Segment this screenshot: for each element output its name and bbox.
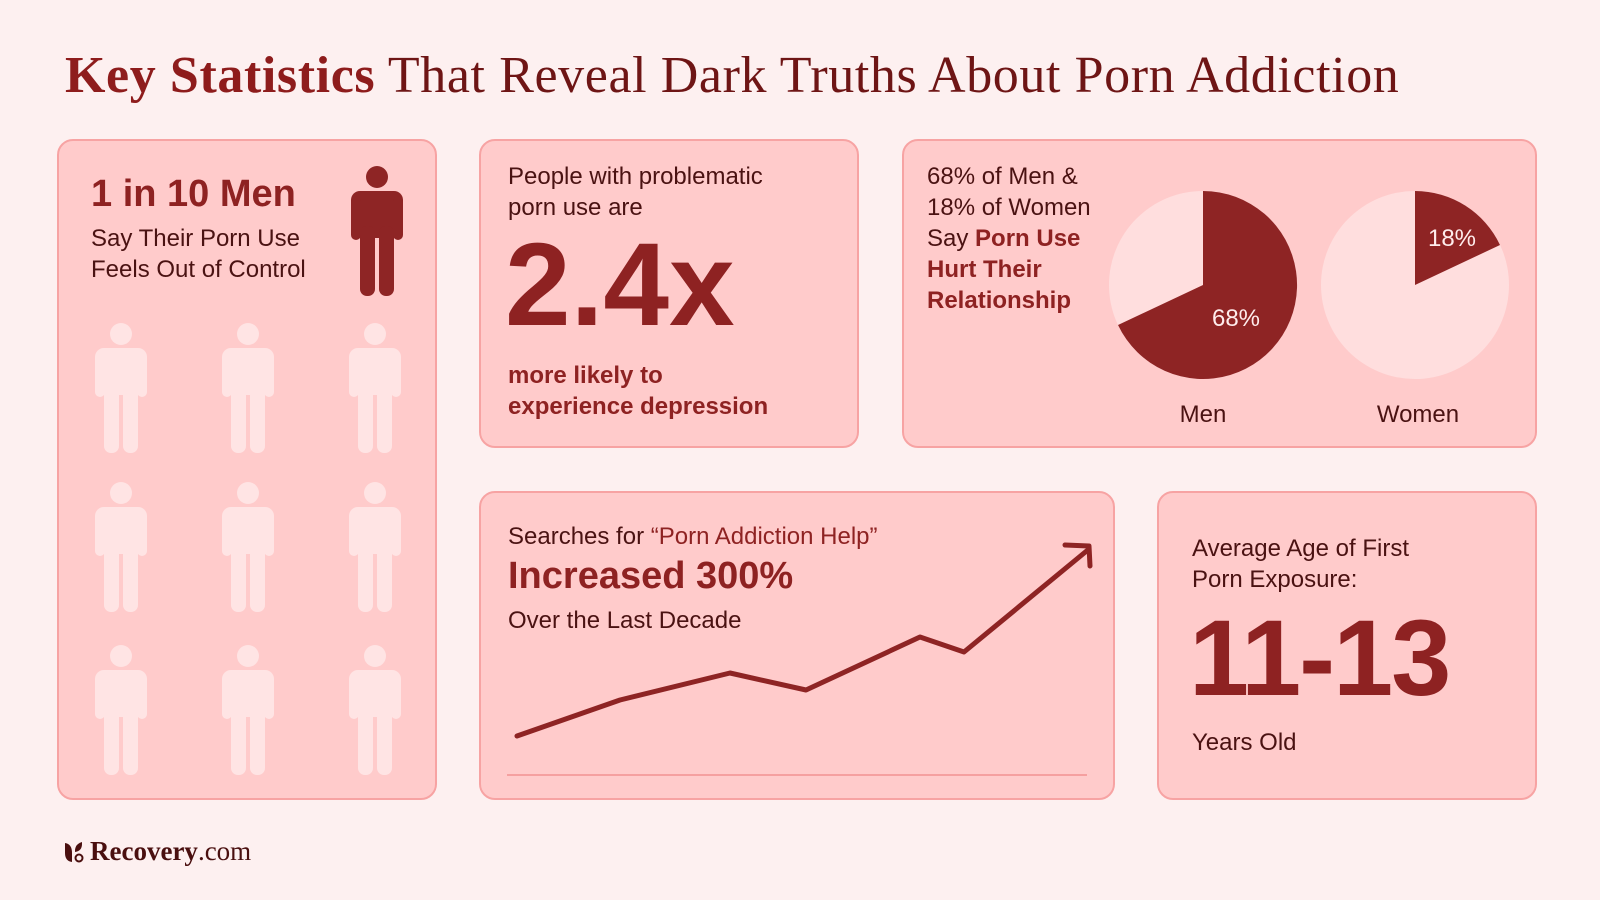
- text: searches: Searches for “Porn Addiction Help”: [508, 523, 878, 550]
- panel: relationships pie charts: [902, 139, 1537, 448]
- text: depression: more likely to: [508, 362, 663, 389]
- icon: people grid: [95, 166, 403, 775]
- text: out of control: [91, 225, 306, 283]
- panel: age of first exposure: [1157, 491, 1537, 800]
- heading: increased 300%: Increased 300%: [508, 555, 793, 597]
- logo: Recovery.com: Recovery.com: [90, 836, 251, 866]
- text: depression: [508, 362, 768, 420]
- text: out of control: Feels Out of Control: [91, 256, 306, 283]
- text: average age: Average Age of First: [1192, 535, 1409, 562]
- text: relationship stat: 68% of Men &: [927, 163, 1078, 190]
- text: depression: experience depression: [508, 393, 768, 420]
- heading: 1 in 10 Men: 1 in 10 Men: [91, 173, 296, 215]
- text: intro: [508, 163, 763, 221]
- pie: women: 18%: [1428, 225, 1476, 252]
- text: average age: [1192, 535, 1409, 593]
- panel: 1 in 10 men: [57, 139, 437, 800]
- text: relationship stat: [927, 163, 1091, 314]
- text: average age: Porn Exposure:: [1192, 566, 1357, 593]
- text: out of control: Say Their Porn Use: [91, 225, 300, 252]
- title: Key Statistics That Reveal Dark Truths About Porn Addiction: [65, 47, 1399, 104]
- pie: women: Women: [1377, 401, 1459, 428]
- text: relationship stat: Say Porn Use: [927, 225, 1080, 252]
- panel: 2.4x depression: [479, 139, 859, 448]
- text: relationship stat: 18% of Women: [927, 194, 1091, 221]
- text: relationship stat: Relationship: [927, 287, 1071, 314]
- text: intro: People with problematic: [508, 163, 763, 190]
- pie: men: [1109, 191, 1297, 428]
- pie: women: [1321, 191, 1509, 428]
- pie: men: Men: [1180, 401, 1226, 428]
- text: years old: Years Old: [1192, 729, 1297, 756]
- big number 11-13: 11-13: [1189, 597, 1449, 718]
- text: decade: Over the Last Decade: [508, 607, 741, 634]
- text: relationship stat: Hurt Their: [927, 256, 1042, 283]
- panel: searches line chart: [479, 491, 1115, 800]
- pie: men: 68%: [1212, 305, 1260, 332]
- text: intro: porn use are: [508, 194, 643, 221]
- big number 2.4x: 2.4x: [505, 219, 735, 351]
